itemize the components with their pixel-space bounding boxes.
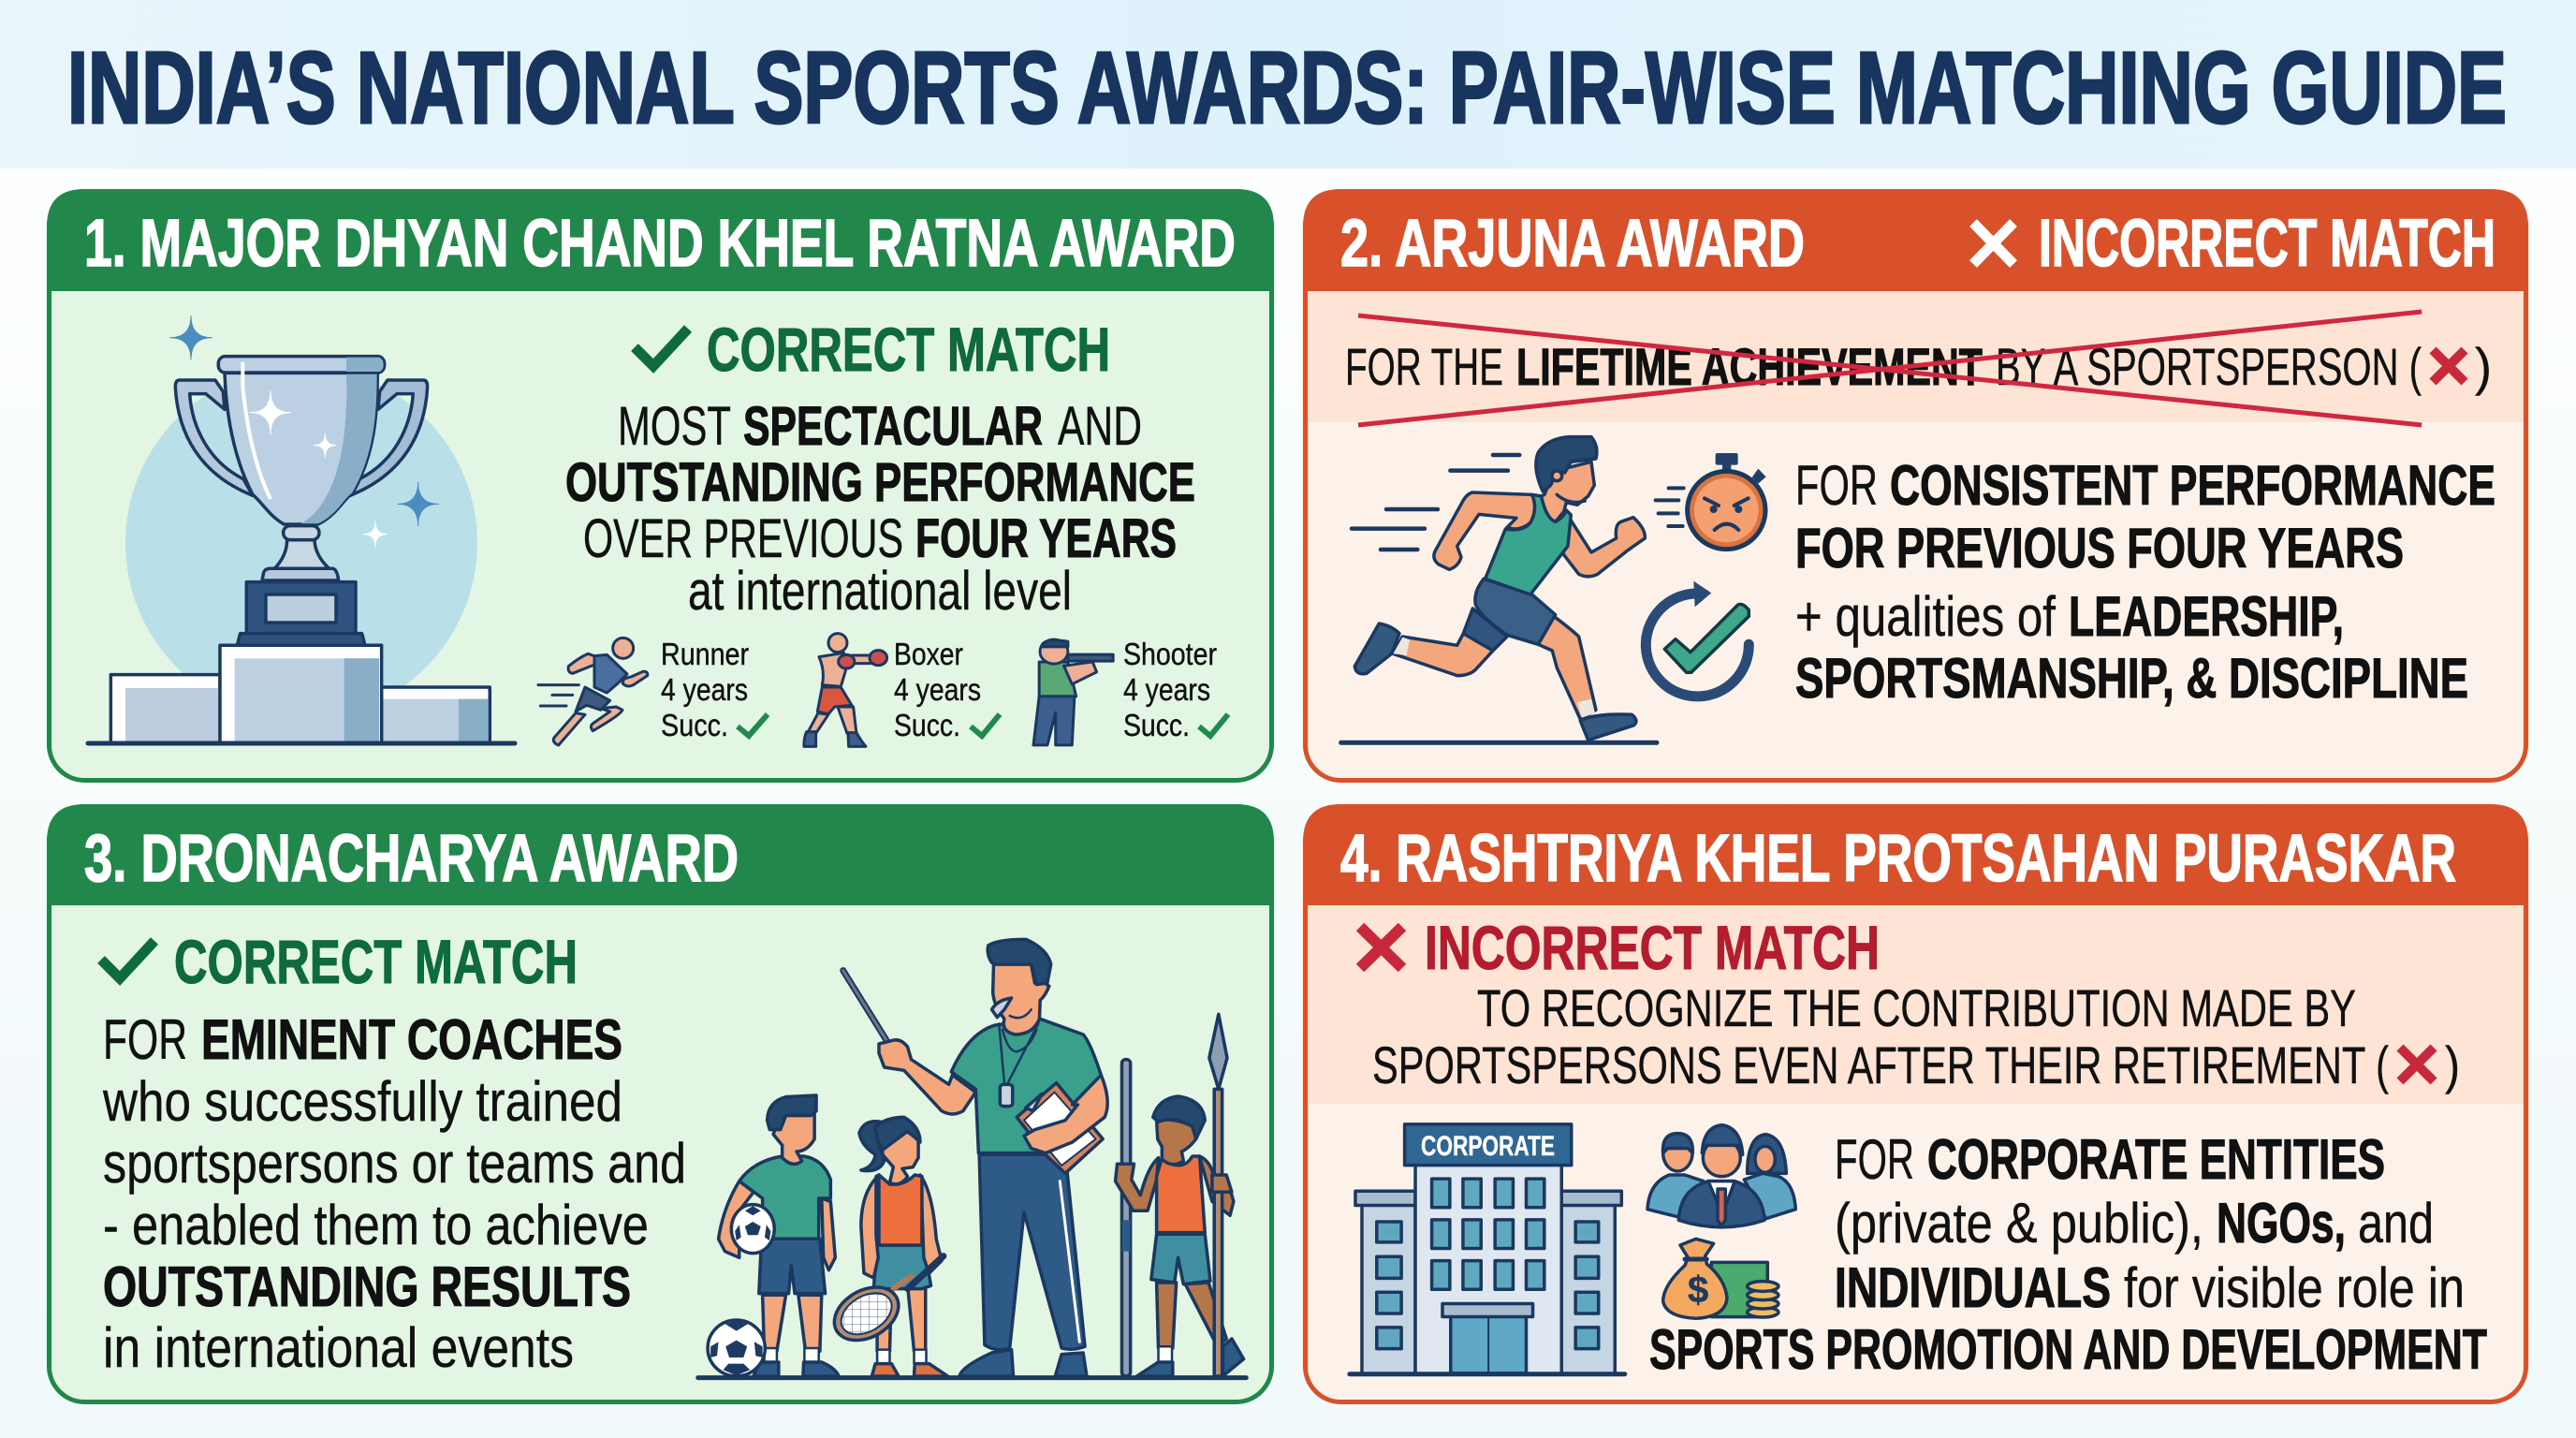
boxer mini icon bbox=[804, 634, 887, 746]
shooter mini stats: Succ. bbox=[1123, 708, 1190, 742]
large runner illustration bbox=[1341, 437, 1657, 742]
shooter mini stats: Shooter bbox=[1123, 637, 1217, 671]
dollar sign: $ bbox=[1688, 1269, 1708, 1311]
incorrect match label: INCORRECT MATCH bbox=[1425, 913, 1880, 982]
panel 3 description: - enabled them to achieve bbox=[103, 1194, 649, 1256]
panel 2 frame bbox=[1303, 189, 2528, 781]
football on ground bbox=[708, 1320, 765, 1376]
panel 4 description: and bbox=[2358, 1192, 2434, 1255]
boxer mini stats bbox=[894, 637, 981, 742]
money bag icon bbox=[1663, 1239, 1778, 1318]
panel 1 description: OVER PREVIOUS bbox=[583, 508, 903, 569]
boxer mini stats: Succ. bbox=[894, 708, 960, 742]
title band bbox=[0, 0, 2576, 169]
panel 1: Khel Ratna bbox=[47, 189, 1274, 781]
boy with football bbox=[719, 1095, 839, 1376]
corporate sign text: CORPORATE bbox=[1421, 1131, 1555, 1162]
struck-out claim: ) bbox=[2475, 337, 2492, 396]
runner mini stats: Succ. bbox=[661, 708, 728, 742]
angry stopwatch icon bbox=[1656, 453, 1766, 550]
panel 2 description: FOR bbox=[1795, 454, 1878, 517]
correct match label bbox=[635, 315, 1110, 384]
runner mini stats: 4 years bbox=[661, 672, 748, 707]
panel 2 heading: 2. ARJUNA AWARD bbox=[1340, 207, 1805, 281]
shooter mini icon bbox=[1033, 639, 1113, 745]
panel 2: Arjuna bbox=[1303, 189, 2528, 781]
shooter mini stats bbox=[1123, 637, 1217, 742]
runner check bbox=[738, 714, 768, 736]
check icon bbox=[635, 329, 688, 366]
runner mini stats bbox=[661, 637, 749, 742]
panel 1 frame bbox=[47, 189, 1274, 781]
panel 1 description bbox=[565, 396, 1195, 622]
panel 4 description: (private & public), bbox=[1835, 1192, 2203, 1255]
girl with racket bbox=[823, 1117, 947, 1376]
panel 3 frame bbox=[47, 804, 1274, 1402]
panel 4 description: FOR bbox=[1835, 1128, 1914, 1191]
coach bbox=[843, 939, 1107, 1376]
panel 3 heading: 3. DRONACHARYA AWARD bbox=[84, 822, 739, 896]
panel 4 frame bbox=[1303, 804, 2528, 1402]
coach and athletes illustration bbox=[698, 939, 1246, 1378]
panel 2 description bbox=[1795, 454, 2496, 710]
boxer mini stats: Boxer bbox=[894, 637, 963, 671]
circular check icon bbox=[1646, 581, 1749, 697]
corporate building illustration bbox=[1350, 1124, 1625, 1374]
trophy on podium illustration bbox=[88, 315, 515, 743]
panel 2 description: + qualities of bbox=[1795, 585, 2056, 648]
panel 1 description: OUTSTANDING PERFORMANCE bbox=[565, 452, 1195, 513]
check icon bbox=[101, 941, 154, 978]
panel 3: Dronacharya bbox=[47, 804, 1274, 1402]
panel 1 description: AND bbox=[1058, 396, 1142, 457]
struck-out claim: LIFETIME ACHIEVEMENT bbox=[1516, 337, 1983, 396]
panel 4: Rashtriya Khel Protsahan Puraskar bbox=[1303, 804, 2528, 1402]
struck-out claim: FOR THE bbox=[1345, 337, 1503, 396]
panel 1 heading: 1. MAJOR DHYAN CHAND KHEL RATNA AWARD bbox=[84, 207, 1236, 281]
panel 1 description: SPECTACULAR bbox=[743, 396, 1043, 457]
panel 3 description: OUTSTANDING RESULTS bbox=[103, 1255, 631, 1318]
javelin athlete bbox=[1116, 1014, 1244, 1376]
shooter mini stats: 4 years bbox=[1123, 672, 1210, 707]
panel 3 description: in international events bbox=[103, 1316, 574, 1379]
x icon bbox=[1973, 223, 2013, 264]
rejected claim bbox=[1372, 978, 2460, 1094]
correct match label: CORRECT MATCH bbox=[174, 927, 578, 996]
boxer check bbox=[971, 714, 1000, 736]
panel 4 description: CORPORATE ENTITIES bbox=[1927, 1128, 2385, 1191]
runner mini stats: Runner bbox=[661, 637, 749, 671]
struck-out claim: BY A SPORTSPERSON ( bbox=[1996, 337, 2422, 396]
panel 1 description: at international level bbox=[688, 561, 1072, 622]
incorrect match label bbox=[1360, 913, 1880, 982]
panel 4 description: for visible role in bbox=[2124, 1256, 2465, 1319]
panel 4 description: INDIVIDUALS bbox=[1835, 1256, 2111, 1319]
correct match label: CORRECT MATCH bbox=[707, 315, 1110, 384]
panel 3 description: EMINENT COACHES bbox=[201, 1008, 622, 1071]
panel 3 description: who successfully trained bbox=[102, 1070, 622, 1133]
group of people icon bbox=[1647, 1125, 1795, 1227]
panel 1 description: FOUR YEARS bbox=[915, 508, 1177, 569]
boxer mini stats: 4 years bbox=[894, 672, 981, 707]
panel 4 description: NGOs, bbox=[2217, 1192, 2346, 1255]
panel 2 description: LEADERSHIP, bbox=[2069, 585, 2344, 648]
panel 4 description bbox=[1649, 1128, 2487, 1381]
panel 3 description bbox=[102, 1008, 686, 1379]
x icon bbox=[1360, 927, 1402, 968]
runner mini icon bbox=[538, 638, 648, 745]
panel 1 description: MOST bbox=[618, 396, 731, 457]
correct match label bbox=[101, 927, 578, 996]
panel 3 description: sportspersons or teams and bbox=[103, 1132, 686, 1195]
struck-out claim bbox=[1345, 312, 2492, 425]
rejected claim: ) bbox=[2445, 1035, 2460, 1094]
shooter check bbox=[1199, 714, 1228, 736]
panel 3 description: FOR bbox=[103, 1008, 187, 1071]
